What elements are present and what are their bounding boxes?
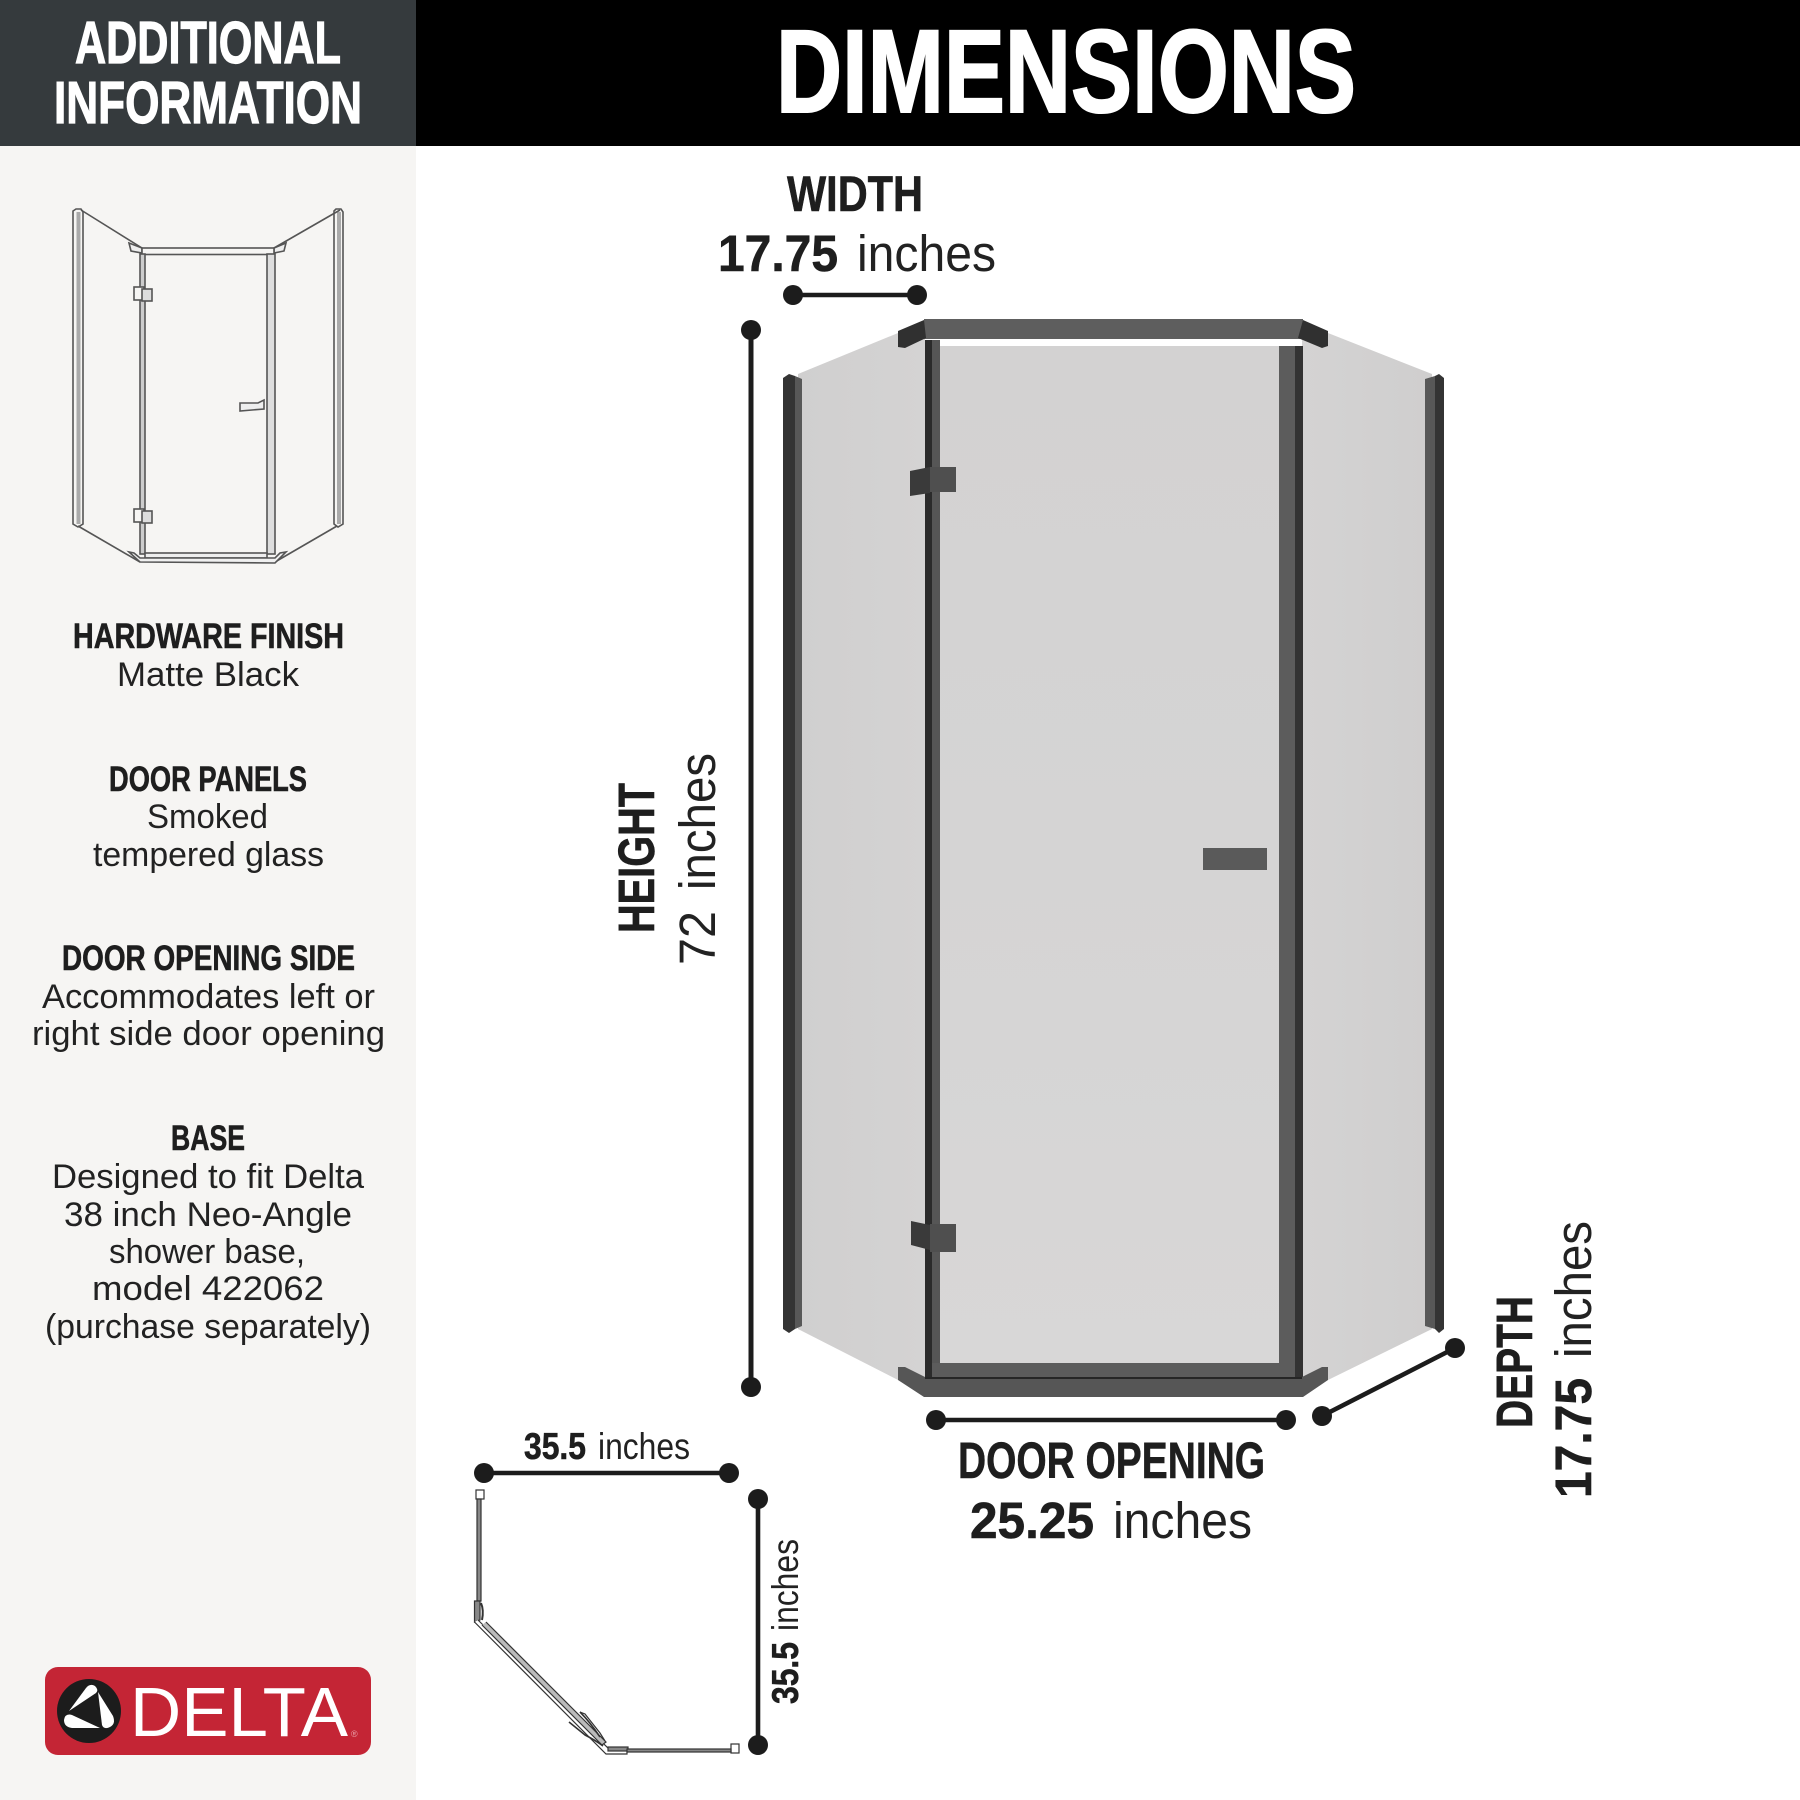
threshold base: [898, 1367, 1328, 1397]
dimension: width: [718, 166, 996, 305]
text block: base: Designed to fit Delta: [52, 1158, 364, 1196]
title banner: dimensions: DIMENSIONS: [776, 6, 1356, 138]
text block: base: (purchase separately): [45, 1308, 371, 1346]
sidebar header: INFORMATION: [54, 70, 362, 136]
dimension: width: inches: [857, 225, 996, 282]
dimension: door opening: [926, 1410, 1296, 1549]
latch-side door stile: [1279, 346, 1303, 1378]
text block: door panels: Smoked: [147, 798, 268, 836]
panel: additional information sidebar: [0, 0, 416, 1800]
text block: door panels: DOOR PANELS: [109, 760, 307, 799]
dimension: height: 72: [669, 911, 726, 965]
hinge-side door stile: [925, 340, 940, 1378]
dimension: door opening: inches: [1113, 1492, 1252, 1549]
bottom hinge: [911, 1221, 956, 1252]
title banner: dimensions: [416, 0, 1800, 146]
sidebar header: [0, 0, 416, 146]
dimension: depth: [1312, 1221, 1602, 1498]
logo: Delta: ®: [351, 1729, 358, 1739]
text block: base: 38 inch Neo-Angle: [64, 1196, 352, 1234]
dimension: depth: 17.75: [1545, 1378, 1602, 1498]
plan dimension: overall width: [474, 1426, 739, 1483]
dimension: depth: inches: [1545, 1221, 1602, 1358]
dimension: width: 17.75: [718, 225, 838, 282]
text block: door opening side: Accommodates left or: [42, 978, 375, 1016]
dimension: height: inches: [669, 753, 726, 890]
text block: base: shower base,: [109, 1233, 305, 1271]
right wall post: [1425, 374, 1444, 1333]
dimension: height: HEIGHT: [608, 783, 665, 933]
shower enclosure illustration: [783, 319, 1444, 1397]
logo: Delta: DELTA: [130, 1673, 348, 1751]
left wall post: [783, 374, 802, 1333]
text block: base: model 422062: [92, 1270, 324, 1308]
plan dimension: overall width: inches: [598, 1426, 690, 1467]
plan dimension: overall width: 35.5: [524, 1426, 586, 1467]
text block: base: [45, 1119, 371, 1346]
door handle: [1203, 848, 1267, 870]
icon: shower enclosure line drawing: [73, 209, 343, 563]
dimension: height: [608, 320, 761, 1397]
dimension: depth: DEPTH: [1486, 1296, 1543, 1428]
text block: door panels: tempered glass: [93, 836, 324, 874]
text block: hardware finish: Matte Black: [117, 656, 300, 694]
text block: door opening side: right side door opening: [32, 1015, 385, 1053]
top header bar: [898, 319, 1328, 348]
plan dimension: overall depth: 35.5: [765, 1642, 806, 1704]
bottom door rail: [932, 1363, 1279, 1377]
floor plan diagram: [474, 1426, 806, 1755]
door glass: [940, 346, 1279, 1363]
text block: door opening side: DOOR OPENING SIDE: [62, 939, 355, 978]
dimension: door opening: 25.25: [970, 1492, 1094, 1549]
logo: Delta: [45, 1667, 371, 1755]
top hinge: [910, 467, 956, 496]
left side glass panel: [798, 333, 925, 1380]
dimension: door opening: DOOR OPENING: [958, 1432, 1265, 1489]
sidebar header: ADDITIONAL: [75, 10, 341, 76]
text block: door panels: [93, 760, 324, 874]
text block: door opening side: [32, 939, 385, 1053]
plan dimension: overall depth: inches: [765, 1539, 806, 1631]
dimension: width: WIDTH: [787, 166, 923, 222]
text block: base: BASE: [171, 1119, 245, 1158]
text block: hardware finish: HARDWARE FINISH: [73, 617, 344, 656]
text block: hardware finish: [73, 617, 344, 694]
plan outline of enclosure: [474, 1490, 739, 1754]
plan dimension: overall depth: [748, 1489, 806, 1755]
right side glass panel: [1302, 333, 1432, 1380]
